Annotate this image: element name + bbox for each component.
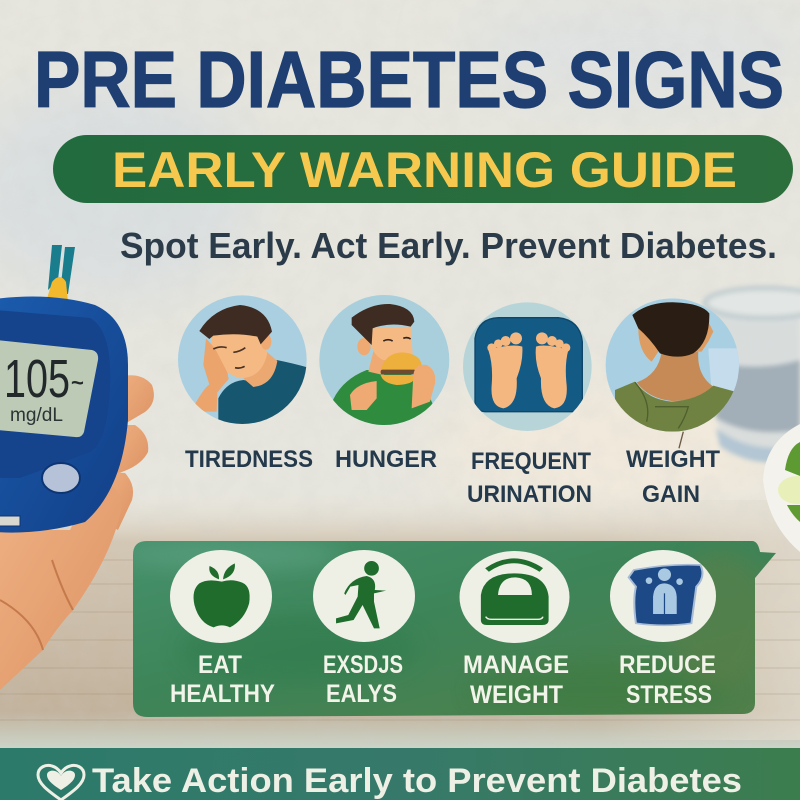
illustration: feet on scale [462,302,595,432]
sign: weight gain [605,298,742,508]
sign: hunger [317,295,453,473]
meter screen: 105 [4,349,70,409]
illustration: tired man [178,295,307,424]
label: TIREDNESS [185,446,313,473]
glucose meter [0,297,128,533]
meter screen: ~ [71,370,84,395]
action: eat healthy [170,550,275,708]
action: manage weight: WEIGHT [470,681,563,709]
footer banner: Take Action Early to Prevent Diabetes [92,762,742,800]
hand holding meter [0,375,154,690]
sign: frequent urination [462,302,595,508]
label: HUNGER [335,446,437,473]
label: FREQUENT [471,448,591,475]
action: eat healthy: HEALTHY [170,680,275,708]
meter button [42,463,80,493]
action: manage weight: MANAGE [463,651,569,679]
meter screen: mg/dL [10,405,63,426]
illustration: neck from behind [605,298,742,448]
action: eat healthy: EAT [198,651,242,679]
strip port [0,516,20,526]
icon: heart [38,765,84,800]
test strip [46,245,75,302]
action: reduce stress [610,550,716,709]
action: exercise: EALYS [326,680,397,708]
banner: early warning guide: EARLY WARNING GUIDE [112,142,737,198]
water glass [705,288,800,463]
label: WEIGHT [626,446,720,473]
illustration: man eating burger [317,295,453,428]
panel: prevention actions [120,539,776,718]
salad bowl [763,424,800,552]
action: exercise: EXSDJS [323,651,403,679]
action: manage weight [460,551,570,709]
sign: tiredness [170,295,313,473]
subtitle: Spot Early. Act Early. Prevent Diabetes. [120,225,777,266]
sign: frequent urination: URINATION [467,481,592,508]
footer banner [0,748,800,800]
palm and thumb [0,487,121,690]
action: reduce stress: REDUCE [619,651,716,679]
sign: weight gain: GAIN [642,481,700,508]
meter screen [0,340,98,437]
banner: early warning guide [53,135,793,203]
fingers [100,375,154,530]
action: reduce stress: STRESS [626,681,712,709]
action: exercise [313,550,415,708]
